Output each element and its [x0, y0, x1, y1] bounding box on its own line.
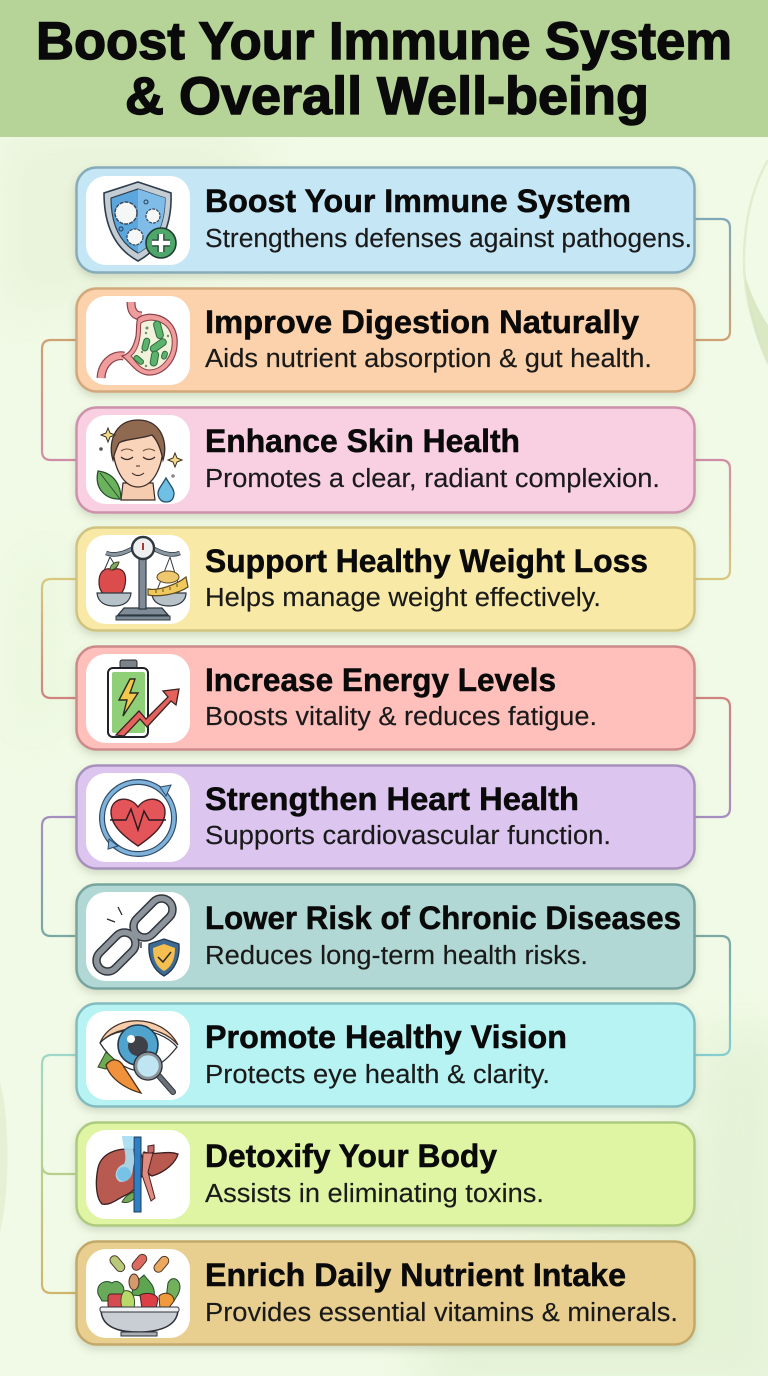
icon: battery with bolt and rising arrow — [108, 660, 179, 737]
card description: Strengthens defenses against pathogens. — [205, 225, 692, 253]
card title: Increase Energy Levels — [205, 662, 556, 698]
card title: Enhance Skin Health — [205, 423, 520, 459]
card: Detoxify Your Body — [76, 1122, 694, 1226]
card title: Enrich Daily Nutrient Intake — [205, 1257, 626, 1293]
card: Support Healthy Weight Loss — [76, 528, 694, 630]
card: Promote Healthy Vision — [76, 1004, 694, 1106]
card: Boost Your Immune System — [76, 168, 694, 272]
card title: Detoxify Your Body — [205, 1138, 497, 1174]
icon: salad bowl with supplement capsules — [98, 1253, 180, 1336]
card title: Strengthen Heart Health — [205, 781, 579, 817]
icon: heart with pulse and circular arrows — [102, 782, 174, 854]
card: Lower Risk of Chronic Diseases — [76, 884, 694, 988]
connector: card 2 to card 3 — [42, 340, 76, 460]
card: Strengthen Heart Health — [76, 766, 694, 868]
icon: liver with vessels — [96, 1136, 178, 1212]
icon: balance scale with apple and tape measure — [97, 537, 188, 620]
connector: card 4 to card 5 — [42, 579, 76, 698]
icon: broken chain and shield — [92, 894, 179, 976]
card description: Helps manage weight effectively. — [205, 584, 601, 612]
card description: Boosts vitality & reduces fatigue. — [205, 703, 597, 731]
header band — [0, 0, 768, 137]
card title: Support Healthy Weight Loss — [205, 543, 648, 579]
connector: card 3 to card 4 — [695, 460, 730, 579]
icon: eye with magnifier and carrot — [98, 1021, 178, 1093]
card title: Improve Digestion Naturally — [205, 304, 639, 340]
connector: card 5 to card 6 — [695, 698, 730, 817]
card title: Lower Risk of Chronic Diseases — [205, 900, 681, 936]
card: Improve Digestion Naturally — [76, 288, 694, 392]
connector: card 6 to card 7 — [42, 817, 76, 936]
title line 2: & Overall Well-being — [125, 67, 649, 126]
card title: Promote Healthy Vision — [205, 1019, 567, 1055]
card: Enrich Daily Nutrient Intake — [76, 1242, 694, 1344]
icon: shield with cells and plus — [104, 182, 176, 261]
icon: stomach with gut bacteria — [101, 302, 177, 378]
card title: Boost Your Immune System — [205, 183, 631, 219]
card description: Reduces long-term health risks. — [205, 942, 588, 970]
card description: Supports cardiovascular function. — [205, 822, 611, 850]
card description: Assists in eliminating toxins. — [205, 1180, 544, 1208]
card description: Protects eye health & clarity. — [205, 1061, 550, 1089]
connector: card 1 to card 2 — [695, 219, 730, 340]
card description: Aids nutrient absorption & gut health. — [205, 345, 652, 373]
card description: Promotes a clear, radiant complexion. — [205, 465, 660, 493]
connector: cards 8, 9 and 10 — [42, 1055, 76, 1293]
card: Enhance Skin Health — [76, 408, 694, 512]
card: Increase Energy Levels — [76, 646, 694, 750]
icon: face with leaf and water drop — [97, 420, 182, 502]
card description: Provides essential vitamins & minerals. — [205, 1299, 678, 1327]
connector: card 7 to card 8 — [695, 936, 730, 1055]
title line 1: Boost Your Immune System — [36, 12, 732, 71]
